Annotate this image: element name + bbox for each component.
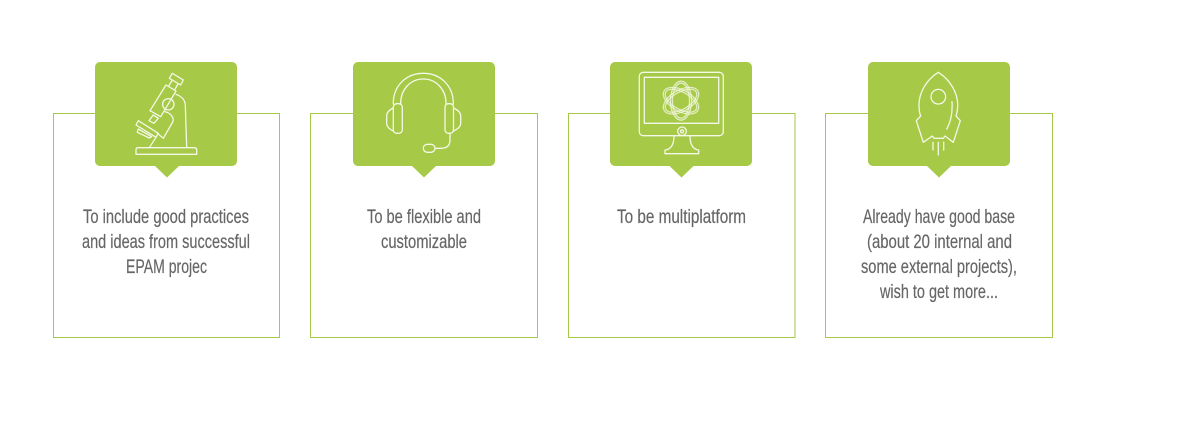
panel: good practices (54, 62, 280, 338)
text: good base: wish to get more... (879, 281, 998, 303)
panel border (568, 114, 795, 338)
panel border (54, 114, 280, 338)
text: flexible: customizable (381, 231, 467, 253)
text: flexible: To be flexible and (367, 206, 481, 228)
icon: headset (387, 73, 461, 152)
icon: monitor with atom (639, 72, 723, 154)
panel: multiplatform (568, 62, 795, 338)
panel: good base (826, 62, 1052, 338)
text: multiplatform: To be multiplatform (617, 206, 746, 228)
green tag with pointer (95, 62, 237, 178)
icon: microscope (136, 73, 197, 154)
text: good practices: To include good practices (83, 206, 249, 228)
panel border (826, 114, 1052, 338)
panel: flexible (310, 62, 538, 338)
panel border (310, 114, 538, 338)
text: good practices (82, 206, 250, 278)
green tag with pointer (610, 62, 752, 178)
text: good base (861, 206, 1017, 303)
text: good base: Already have good base (863, 206, 1015, 228)
green tag with pointer (868, 62, 1010, 178)
text: good practices: EPAM projec (126, 256, 207, 278)
text: good practices: and ideas from successful (82, 231, 250, 253)
green tag with pointer (353, 62, 495, 178)
text: good base: some external projects), (861, 256, 1017, 278)
icon: rocket (916, 72, 960, 155)
text: good base: (about 20 internal and (867, 231, 1012, 253)
text: flexible (367, 206, 481, 253)
